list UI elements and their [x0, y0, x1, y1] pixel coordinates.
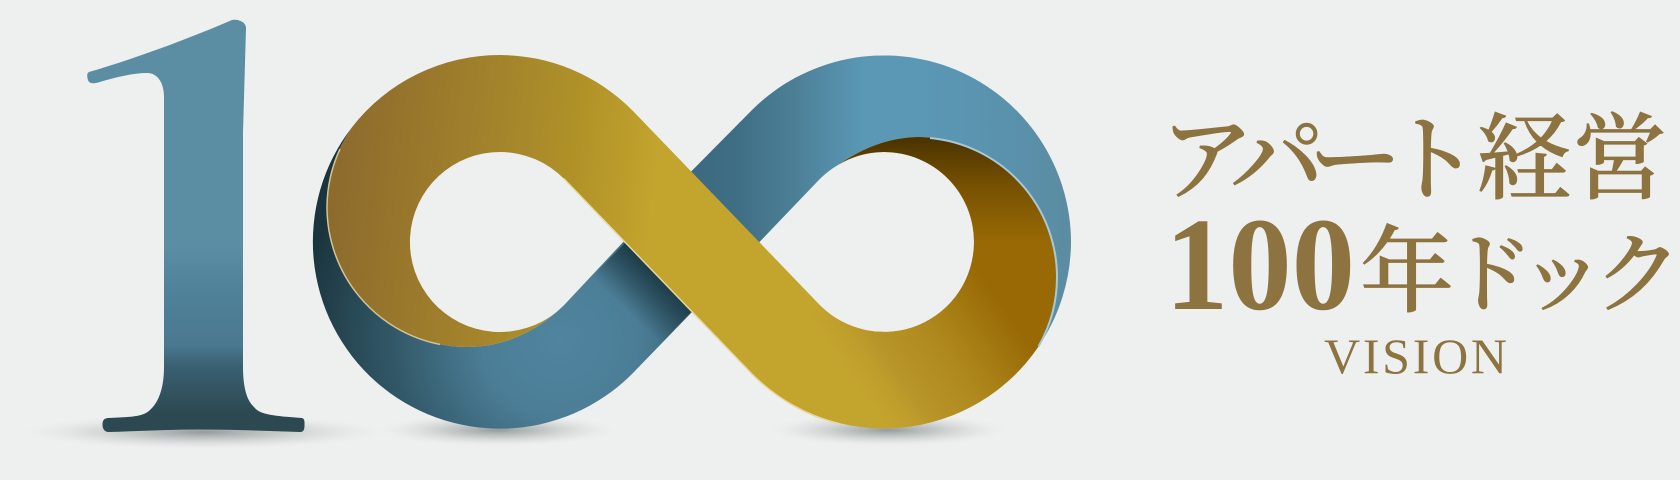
- heading line 2: number: 100: [1165, 190, 1355, 338]
- gold band: right side shading: [752, 242, 1057, 428]
- blue band: upper right loop: [656, 55, 1071, 346]
- pale edge highlights: [327, 138, 1057, 424]
- subheading VISION: VISION: [1324, 328, 1507, 384]
- heading line 2: year kanji: 年: [1360, 196, 1454, 331]
- crossing shadow on blue band: [564, 243, 692, 374]
- numeral 1: [87, 20, 305, 432]
- heading line 1: katakana: アパート: [1160, 84, 1480, 219]
- ground shadows: [13, 413, 1013, 450]
- heading line 1: kanji: 経営: [1477, 83, 1667, 218]
- heading line 2: katakana: ドック: [1446, 205, 1680, 331]
- blue band: lower left loop: [313, 127, 726, 429]
- infinity symbol: [313, 55, 1071, 429]
- gold band: [327, 55, 1057, 428]
- gold band: dark underside at top of right loop: [838, 137, 1053, 243]
- wordmark: [1160, 83, 1680, 384]
